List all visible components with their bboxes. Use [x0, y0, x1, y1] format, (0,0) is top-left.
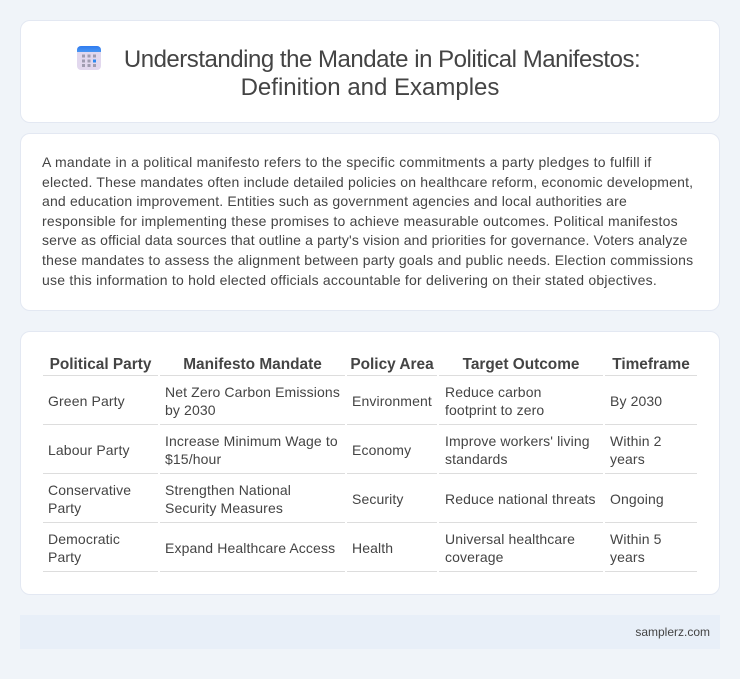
row: Democratic Party: Party — [48, 549, 81, 565]
row: Conservative Party: Party — [48, 500, 81, 516]
text block: description: A mandate in a political manifesto refers to the specific commitments a party pledges to fulfill if — [42, 154, 652, 170]
row: Labour Party: standards — [445, 451, 508, 467]
row: Labour Party: years — [610, 451, 645, 467]
text block: description: serve as official data sources that outline a party's vision and priorities for governance. Voters analyze — [42, 232, 688, 248]
row: Democratic Party: Expand Healthcare Access — [165, 540, 335, 556]
title: Definition and Examples — [241, 74, 499, 101]
row: Green Party: Net Zero Carbon Emissions — [165, 384, 340, 400]
footer bar — [20, 615, 720, 649]
row: Green Party: by 2030 — [165, 402, 216, 418]
row: Labour Party — [48, 433, 662, 467]
row: Democratic Party: Health — [352, 540, 393, 556]
row: Conservative Party: Conservative — [48, 482, 131, 498]
row: Green Party: By 2030 — [610, 393, 662, 409]
row: Democratic Party: years — [610, 549, 645, 565]
title: Understanding the Mandate in Political Manifestos: — [124, 46, 640, 73]
text block: description — [42, 154, 693, 288]
footer text: source: samplerz.com — [635, 625, 710, 639]
row: Green Party: Green Party — [48, 393, 125, 409]
table header row — [50, 356, 690, 373]
row: Democratic Party: Universal healthcare — [445, 531, 575, 547]
row: Democratic Party: Within 5 — [610, 531, 662, 547]
panel: table — [20, 331, 720, 595]
row: Green Party: Environment — [352, 393, 432, 409]
icon: calendar — [77, 46, 101, 70]
row: Conservative Party: Strengthen National — [165, 482, 291, 498]
row: Green Party: Reduce carbon — [445, 384, 542, 400]
table header row: Target Outcome — [463, 356, 579, 373]
table header row: Political Party — [50, 356, 151, 373]
row: Democratic Party — [48, 531, 662, 565]
text block: description: use this information to hold elected officials accountable for delivering on their stated objectives. — [42, 272, 657, 288]
row: Green Party: footprint to zero — [445, 402, 544, 418]
table header row: Timeframe — [612, 356, 690, 373]
row: Labour Party: Increase Minimum Wage to — [165, 433, 338, 449]
table header row: Manifesto Mandate — [183, 356, 322, 373]
row: Conservative Party: Security — [352, 491, 404, 507]
row: Conservative Party: Security Measures — [165, 500, 283, 516]
row: Labour Party: Within 2 — [610, 433, 662, 449]
panel: header — [20, 20, 720, 123]
row: Conservative Party: Reduce national threats — [445, 491, 596, 507]
table: mandates — [43, 356, 697, 572]
text block: description: and education improvement. Entities such as government agencies and local authorities are — [42, 193, 627, 209]
title — [124, 46, 640, 101]
row: Conservative Party — [48, 482, 664, 516]
table header row: Policy Area — [350, 356, 434, 373]
row: Labour Party: Improve workers' living — [445, 433, 590, 449]
row: Labour Party: Economy — [352, 442, 411, 458]
text block: description: elected. These mandates often include detailed policies on healthcare reform, economic development, — [42, 174, 693, 190]
panel: description — [20, 133, 720, 311]
text block: description: responsible for implementing these promises to achieve measurable outcomes. Political manifestos — [42, 213, 678, 229]
row: Democratic Party: Democratic — [48, 531, 120, 547]
row: Democratic Party: coverage — [445, 549, 504, 565]
row: Conservative Party: Ongoing — [610, 491, 664, 507]
text block: description: these mandates to assess the alignment between party goals and public needs. Election commissions — [42, 252, 693, 268]
row: Labour Party: $15/hour — [165, 451, 221, 467]
row: Green Party — [48, 384, 662, 418]
row: Labour Party: Labour Party — [48, 442, 130, 458]
